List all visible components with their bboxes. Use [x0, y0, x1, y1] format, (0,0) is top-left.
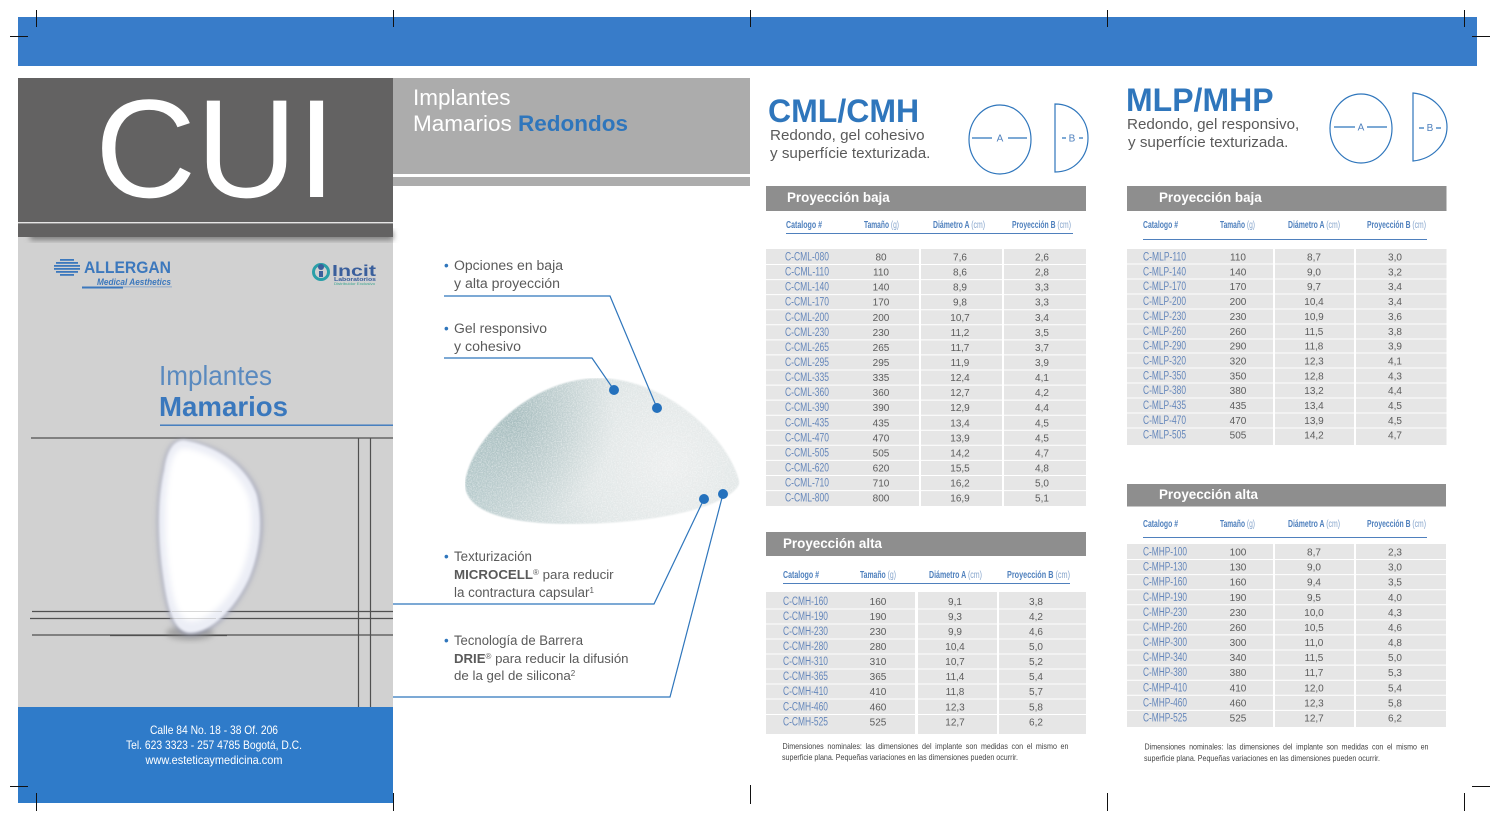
table: MHP proyeccion alta: 11,5	[1305, 653, 1324, 664]
table: MLP proyeccion baja: 4,1	[1388, 356, 1402, 368]
table: MHP proyeccion alta: 12,3	[1304, 698, 1324, 709]
callout: drie: 2	[571, 669, 576, 678]
table: MHP proyeccion alta: C-MHP-460	[1143, 697, 1187, 709]
table: CML proyeccion baja: C-CML-390	[785, 402, 829, 414]
logo: Incit: Distribuidor Exclusivo	[334, 282, 375, 286]
table: MLP proyeccion baja: 505	[1230, 431, 1247, 442]
heading: CML/CMH: Redondo, gel cohesivo	[770, 127, 925, 144]
diagram: MLP dimensions: A	[1358, 122, 1365, 134]
table: CMH proyeccion alta: Tamaño (g)	[860, 570, 896, 581]
table: CML proyeccion baja: 800	[873, 494, 890, 505]
top blue band	[18, 17, 1477, 66]
heading: Implantes Mamarios	[159, 360, 393, 426]
diagram: CML dimensions: B	[1069, 134, 1076, 144]
table: CMH proyeccion alta: C-CMH-190	[783, 611, 828, 623]
table: CML proyeccion baja: C-CML-470	[785, 432, 829, 444]
table: MHP proyeccion alta: Tamaño (g)	[1220, 519, 1255, 530]
table: MLP proyeccion baja: C-MLP-110	[1143, 252, 1186, 264]
table: CML proyeccion baja: C-CML-800	[785, 493, 829, 505]
table: MHP proyeccion alta: 190	[1230, 593, 1247, 604]
table: CML proyeccion baja: 505	[873, 448, 890, 459]
logo: Incit: Laboratorios	[334, 277, 376, 283]
diagram: CML dimensions	[969, 104, 1088, 174]
panel: left cover	[18, 70, 393, 803]
table: CML proyeccion baja: 16,2	[950, 479, 970, 490]
implant: dome	[465, 378, 740, 524]
table: CMH proyeccion alta: 6,2	[1029, 718, 1043, 728]
table: MLP proyeccion baja: 11,8	[1305, 342, 1324, 353]
callout: drie: DRIE	[454, 651, 486, 666]
table: MLP proyeccion baja: 170	[1230, 282, 1247, 293]
footnote: MLP/MHP	[1144, 742, 1429, 763]
table: CML proyeccion baja: 80	[875, 252, 887, 264]
table: MLP proyeccion baja: 8,7	[1307, 252, 1321, 264]
table: CML proyeccion baja: 470	[873, 433, 890, 444]
table: MLP proyeccion baja: 13,4	[1304, 401, 1324, 412]
table: MHP proyeccion alta: 5,4	[1388, 683, 1402, 694]
callout: drie: •	[444, 633, 449, 648]
table: CML proyeccion baja: 265	[873, 343, 890, 354]
diagram: MLP dimensions	[1330, 93, 1447, 163]
table: MHP proyeccion alta	[1127, 484, 1447, 727]
callout: microcell: la contractura capsular	[454, 585, 589, 600]
table: CML proyeccion baja: 7,6	[953, 252, 967, 264]
table: CMH proyeccion alta: 11,4	[946, 672, 965, 683]
table: CMH proyeccion alta: 3,8	[1029, 597, 1043, 608]
table: MLP proyeccion baja: 12,3	[1304, 356, 1324, 368]
table: MLP proyeccion baja: C-MLP-505	[1143, 430, 1186, 442]
table: CML proyeccion baja: 11,2	[951, 328, 970, 339]
table: CMH proyeccion alta: 160	[870, 597, 887, 608]
table: CML proyeccion baja: C-CML-295	[785, 357, 829, 369]
table: CMH proyeccion alta: 4,2	[1029, 612, 1043, 623]
callout: drie: Tecnología de Barrera	[454, 633, 583, 648]
table: MHP proyeccion alta: 100	[1230, 548, 1247, 558]
table: MLP proyeccion baja: C-MLP-380	[1143, 385, 1186, 397]
table: MLP proyeccion baja: Catalogo #	[1143, 220, 1178, 231]
table: MLP proyeccion baja: C-MLP-140	[1143, 266, 1186, 278]
table: CMH proyeccion alta: 4,6	[1029, 627, 1043, 638]
table: CML proyeccion baja: 3,3	[1035, 283, 1049, 294]
table: MHP proyeccion alta: 2,3	[1388, 548, 1402, 558]
table: MLP proyeccion baja: 3,9	[1388, 342, 1402, 353]
table: CML proyeccion baja: 10,7	[950, 313, 970, 324]
table: CML proyeccion baja: 2,8	[1035, 268, 1049, 279]
callout: drie: ®	[486, 652, 492, 661]
table: CMH proyeccion alta: 190	[870, 612, 887, 623]
heading: CML/CMH: y superfície texturizada.	[770, 145, 930, 162]
table: MLP proyeccion baja: 9,7	[1307, 282, 1321, 293]
table: CML proyeccion baja: Proyección baja	[787, 190, 890, 205]
table: CML proyeccion baja: 4,1	[1035, 373, 1049, 384]
table: MLP proyeccion baja: 4,7	[1388, 431, 1402, 442]
table: MLP proyeccion baja: 230	[1230, 312, 1247, 323]
heading: CML/CMH	[768, 93, 930, 162]
table: CML proyeccion baja: 435	[873, 418, 890, 429]
table: MHP proyeccion alta: C-MHP-260	[1143, 622, 1187, 634]
table: MLP proyeccion baja: 435	[1230, 401, 1247, 412]
heading: MLP/MHP	[1126, 82, 1299, 151]
table: MLP proyeccion baja: 320	[1230, 356, 1247, 368]
table: CML proyeccion baja: Tamaño (g)	[864, 220, 899, 231]
table: MLP proyeccion baja: C-MLP-170	[1143, 281, 1186, 293]
callout: microcell: Texturización	[454, 549, 532, 564]
table: CML proyeccion baja: 4,5	[1035, 433, 1049, 444]
callout: gel: •	[444, 321, 449, 336]
table: MLP proyeccion baja: 470	[1230, 416, 1247, 427]
table: MLP proyeccion baja: C-MLP-470	[1143, 415, 1186, 427]
table: MHP proyeccion alta: 10,0	[1304, 608, 1324, 619]
table: MLP proyeccion baja: Diámetro A (cm)	[1288, 220, 1340, 231]
callout: gel	[444, 321, 619, 395]
table: MHP proyeccion alta: Catalogo #	[1143, 519, 1178, 530]
table: CMH proyeccion alta: C-CMH-160	[783, 596, 828, 608]
callout: proyeccion: Opciones en baja	[454, 258, 564, 273]
table: MHP proyeccion alta: 4,0	[1388, 593, 1402, 604]
table: MLP proyeccion baja: 3,4	[1388, 297, 1402, 308]
table: MLP proyeccion baja: 3,6	[1388, 312, 1402, 323]
table: CMH proyeccion alta: 525	[870, 718, 887, 728]
table: MLP proyeccion baja: C-MLP-230	[1143, 311, 1186, 323]
table: MHP proyeccion alta: 9,5	[1307, 593, 1321, 604]
table: MHP proyeccion alta: C-MHP-380	[1143, 667, 1187, 679]
panel: middle header	[393, 78, 750, 186]
table: MHP proyeccion alta: 12,0	[1304, 683, 1324, 694]
table: MHP proyeccion alta: C-MHP-340	[1143, 652, 1187, 664]
table: MLP proyeccion baja: 12,8	[1304, 371, 1324, 382]
table: CMH proyeccion alta: 12,7	[945, 718, 965, 728]
table: MHP proyeccion alta: 4,8	[1388, 638, 1402, 649]
table: CML proyeccion baja: 390	[873, 403, 890, 414]
table: CML proyeccion baja: 11,9	[951, 358, 970, 369]
heading: MLP/MHP: Redondo, gel responsivo,	[1127, 116, 1299, 133]
table: CMH proyeccion alta: C-CMH-525	[783, 716, 828, 728]
table: CML proyeccion baja: C-CML-710	[785, 478, 829, 490]
table: MHP proyeccion alta: 12,7	[1304, 714, 1324, 724]
table: CML proyeccion baja: 620	[873, 464, 890, 474]
table: CMH proyeccion alta: Diámetro A (cm)	[929, 570, 982, 581]
table: MLP proyeccion baja: 380	[1230, 386, 1247, 397]
diagram: CML dimensions: A	[997, 134, 1004, 144]
table: MHP proyeccion alta: C-MHP-300	[1143, 637, 1187, 649]
table: CML proyeccion baja: C-CML-230	[785, 327, 829, 339]
table: CML proyeccion baja: 4,8	[1035, 464, 1049, 474]
callout: drie: para reducir la difusión	[491, 651, 628, 666]
table: CML proyeccion baja: 15,5	[950, 464, 970, 474]
table: MHP proyeccion alta: 5,0	[1388, 653, 1402, 664]
table: MLP proyeccion baja: C-MLP-435	[1143, 400, 1186, 412]
table: CMH proyeccion alta: 230	[870, 627, 887, 638]
table: MHP proyeccion alta: 230	[1230, 608, 1247, 619]
diagram: MLP dimensions: B	[1427, 123, 1434, 134]
table: MHP proyeccion alta: 130	[1230, 563, 1247, 574]
table: CML proyeccion baja: 5,0	[1035, 479, 1049, 490]
table: MLP proyeccion baja: C-MLP-290	[1143, 341, 1186, 353]
table: CMH proyeccion alta: 10,7	[945, 657, 965, 668]
table: CMH proyeccion alta: 310	[870, 657, 887, 668]
table: MLP proyeccion baja: Proyección B (cm)	[1367, 220, 1426, 231]
table: CMH proyeccion alta: 5,7	[1029, 687, 1043, 698]
table: MHP proyeccion alta: Proyección alta	[1159, 487, 1259, 502]
table: MLP proyeccion baja: C-MLP-320	[1143, 356, 1186, 368]
table: MHP proyeccion alta: Proyección B (cm)	[1367, 519, 1426, 530]
table: MLP proyeccion baja: 4,5	[1388, 401, 1402, 412]
table: CMH proyeccion alta: 9,9	[948, 627, 962, 638]
table: MLP proyeccion baja: 110	[1230, 252, 1246, 264]
table: CML proyeccion baja: 5,1	[1035, 494, 1049, 505]
table: CML proyeccion baja: 9,8	[953, 298, 967, 309]
table: CMH proyeccion alta: C-CMH-460	[783, 702, 828, 714]
table: MHP proyeccion alta: C-MHP-410	[1143, 682, 1187, 694]
grid lines	[30, 438, 393, 707]
table: CML proyeccion baja: C-CML-170	[785, 297, 829, 309]
table: CML proyeccion baja: 3,5	[1035, 328, 1049, 339]
table: CMH proyeccion alta: 5,0	[1029, 642, 1043, 653]
table: CMH proyeccion alta: 11,8	[946, 687, 965, 698]
table: MHP proyeccion alta: 410	[1230, 683, 1247, 694]
table: CMH proyeccion alta: Proyección B (cm)	[1007, 570, 1070, 581]
table: CMH proyeccion alta: 5,4	[1029, 672, 1043, 683]
table: MLP proyeccion baja: 9,0	[1307, 267, 1321, 278]
logo: Incit: Incit	[332, 263, 376, 280]
logo: Allergan: Medical Aesthetics	[97, 277, 171, 288]
table: MHP proyeccion alta: C-MHP-130	[1143, 562, 1187, 574]
callout: microcell: MICROCELL	[454, 567, 533, 582]
table: CML proyeccion baja: 335	[873, 373, 890, 384]
table: CMH proyeccion alta: 12,3	[945, 702, 965, 714]
implant: side view	[158, 440, 262, 640]
table: CMH proyeccion alta: C-CMH-310	[783, 656, 828, 668]
table: CMH proyeccion alta: 5,8	[1029, 702, 1043, 714]
table: CML proyeccion baja: C-CML-360	[785, 387, 829, 399]
table: MLP proyeccion baja: 200	[1230, 297, 1247, 308]
table: CML proyeccion baja: 295	[873, 358, 890, 369]
table: CML proyeccion baja: 3,4	[1035, 313, 1049, 324]
table: MHP proyeccion alta: 9,4	[1307, 578, 1321, 589]
table: CML proyeccion baja: 13,4	[950, 418, 970, 429]
table: MHP proyeccion alta: 9,0	[1307, 563, 1321, 574]
table: CMH proyeccion alta	[766, 532, 1086, 734]
callout: microcell: para reducir	[539, 567, 614, 582]
footer: contact: Tel. 623 3323 - 257 4785 Bogotá, D.C.	[126, 738, 302, 752]
table: CML proyeccion baja: 4,4	[1035, 403, 1049, 414]
callout: proyeccion: •	[444, 258, 449, 273]
table: CML proyeccion baja: C-CML-505	[785, 447, 829, 459]
table: CML proyeccion baja: 16,9	[950, 494, 970, 505]
table: CMH proyeccion alta: C-CMH-280	[783, 641, 828, 653]
table: MHP proyeccion alta: 4,3	[1388, 608, 1402, 619]
table: MHP proyeccion alta: C-MHP-525	[1143, 712, 1187, 724]
table: CML proyeccion baja: Catalogo #	[786, 220, 822, 231]
table: MLP proyeccion baja: Tamaño (g)	[1220, 220, 1255, 231]
table: MLP proyeccion baja: 290	[1230, 342, 1247, 353]
table: CML proyeccion baja: C-CML-140	[785, 282, 829, 294]
table: MLP proyeccion baja: 140	[1230, 267, 1247, 278]
table: CML proyeccion baja: 3,9	[1035, 358, 1049, 369]
title: CUI: CUI	[95, 70, 336, 227]
callout: drie: de la gel de silicona	[454, 668, 571, 683]
table: CML proyeccion baja: 12,7	[950, 388, 970, 399]
table: MHP proyeccion alta: 340	[1230, 653, 1247, 664]
table: MHP proyeccion alta: 11,0	[1305, 638, 1324, 649]
table: MHP proyeccion alta: 260	[1230, 623, 1247, 634]
heading: Implantes Mamarios: Mamarios	[159, 391, 288, 422]
table: MLP proyeccion baja: 14,2	[1304, 431, 1324, 442]
table: MLP proyeccion baja: 10,4	[1304, 297, 1324, 308]
table: MLP proyeccion baja: 4,3	[1388, 371, 1402, 382]
panel: middle header: Implantes	[413, 85, 511, 110]
table: CMH proyeccion alta: C-CMH-365	[783, 671, 828, 683]
table: CML proyeccion baja: 3,3	[1035, 298, 1049, 309]
table: CML proyeccion baja: 170	[873, 298, 890, 309]
footer: contact: www.esteticaymedicina.com	[145, 753, 282, 767]
table: CML proyeccion baja: Diámetro A (cm)	[933, 220, 985, 231]
table: MHP proyeccion alta: 5,3	[1388, 668, 1402, 679]
table: MHP proyeccion alta: 160	[1230, 578, 1247, 589]
footnote: CML/CMH: Dimensiones nominales: las dimensiones del implante son medidas con el mismo en	[782, 741, 1069, 751]
table: CML proyeccion baja: 710	[873, 479, 890, 490]
table: MHP proyeccion alta: 10,5	[1304, 623, 1324, 634]
table: MLP proyeccion baja: 3,8	[1388, 327, 1402, 338]
table: MHP proyeccion alta: 525	[1230, 714, 1247, 724]
table: MLP proyeccion baja: 3,0	[1388, 252, 1402, 264]
table: CML proyeccion baja: 360	[873, 388, 890, 399]
table: CML proyeccion baja: Proyección B (cm)	[1012, 220, 1071, 231]
table: MHP proyeccion alta: C-MHP-190	[1143, 592, 1187, 604]
table: CML proyeccion baja: 4,2	[1035, 388, 1049, 399]
table: MLP proyeccion baja: 3,4	[1388, 282, 1402, 293]
logo: Allergan	[54, 259, 172, 288]
table: CML proyeccion baja: C-CML-265	[785, 342, 829, 354]
table: CML proyeccion baja: C-CML-080	[785, 252, 829, 264]
table: MHP proyeccion alta: C-MHP-100	[1143, 546, 1187, 558]
table: MLP proyeccion baja: 4,5	[1388, 416, 1402, 427]
table: CML proyeccion baja: 8,9	[953, 283, 967, 294]
table: CMH proyeccion alta: Proyección alta	[783, 536, 883, 551]
table: MLP proyeccion baja: 13,9	[1304, 416, 1324, 427]
table: CMH proyeccion alta: 460	[870, 702, 887, 714]
heading: MLP/MHP: y superfície texturizada.	[1128, 134, 1288, 151]
callout: microcell	[393, 494, 709, 604]
table: CML proyeccion baja: 14,2	[950, 448, 970, 459]
table: CML proyeccion baja: 13,9	[950, 433, 970, 444]
table: MLP proyeccion baja: 10,9	[1304, 312, 1324, 323]
table: CML proyeccion baja: C-CML-435	[785, 417, 829, 429]
table: CMH proyeccion alta: 410	[870, 687, 887, 698]
table: CML proyeccion baja: 8,6	[953, 268, 967, 279]
callout: microcell: ®	[533, 568, 539, 577]
table: MLP proyeccion baja: 4,4	[1388, 386, 1402, 397]
table: MLP proyeccion baja: 11,5	[1305, 327, 1324, 338]
table: MHP proyeccion alta: 4,6	[1388, 623, 1402, 634]
table: MHP proyeccion alta: C-MHP-230	[1143, 607, 1187, 619]
callout: proyeccion	[444, 258, 662, 413]
table: CMH proyeccion alta: 10,4	[945, 642, 965, 653]
table: MLP proyeccion baja: 260	[1230, 327, 1247, 338]
table: CMH proyeccion alta: 280	[870, 642, 887, 653]
table: CML proyeccion baja	[766, 186, 1086, 506]
table: MHP proyeccion alta: 3,0	[1388, 563, 1402, 574]
table: CML proyeccion baja: 12,4	[950, 373, 970, 384]
footnote: CML/CMH: superficie plana. Pequeñas variaciones en las dimensiones pueden ocurrir.	[782, 752, 1018, 762]
table: CML proyeccion baja: 140	[873, 283, 890, 294]
table: MLP proyeccion baja: 3,2	[1388, 267, 1402, 278]
table: MHP proyeccion alta: 380	[1230, 668, 1247, 679]
table: CML proyeccion baja: 4,5	[1035, 418, 1049, 429]
table: MLP proyeccion baja	[1127, 186, 1447, 445]
callout: gel: y cohesivo	[454, 339, 521, 354]
table: MHP proyeccion alta: 6,2	[1388, 714, 1402, 724]
table: CML proyeccion baja: 4,7	[1035, 448, 1049, 459]
footnote: MLP/MHP: Dimensiones nominales: las dimensiones del implante son medidas con el mismo en	[1144, 742, 1429, 752]
table: CML proyeccion baja: 230	[873, 328, 890, 339]
table: CML proyeccion baja: 12,9	[950, 403, 970, 414]
table: MHP proyeccion alta: 300	[1230, 638, 1247, 649]
table: MLP proyeccion baja: 13,2	[1304, 386, 1324, 397]
table: MHP proyeccion alta: 5,8	[1388, 698, 1402, 709]
callout: drie	[393, 489, 728, 697]
footer: contact: Calle 84 No. 18 - 38 Of. 206	[150, 723, 278, 737]
panel: middle header: Mamarios Redondos	[413, 111, 628, 136]
table: CML proyeccion baja: C-CML-110	[785, 267, 829, 279]
heading: CML/CMH: CML/CMH	[768, 93, 919, 129]
heading: Implantes Mamarios: Implantes	[159, 360, 272, 391]
footnote: MLP/MHP: superficie plana. Pequeñas variaciones en las dimensiones pueden ocurrir.	[1144, 753, 1380, 763]
table: CMH proyeccion alta: 9,1	[948, 597, 962, 608]
table: MLP proyeccion baja: C-MLP-260	[1143, 326, 1186, 338]
table: MLP proyeccion baja: Proyección baja	[1159, 190, 1262, 205]
footnote: CML/CMH	[782, 741, 1069, 762]
table: MLP proyeccion baja: C-MLP-350	[1143, 370, 1186, 382]
table: CML proyeccion baja: 11,7	[951, 343, 970, 354]
logo: Allergan: ALLERGAN	[84, 259, 171, 277]
callout: gel: Gel responsivo	[454, 321, 547, 336]
table: CML proyeccion baja: 200	[873, 313, 890, 324]
table: CML proyeccion baja: C-CML-335	[785, 372, 829, 384]
table: CML proyeccion baja: C-CML-620	[785, 462, 829, 474]
callout: microcell: 1	[589, 586, 594, 595]
table: CMH proyeccion alta: C-CMH-230	[783, 626, 828, 638]
logo: Incit	[314, 263, 376, 286]
table: CMH proyeccion alta: 365	[870, 672, 887, 683]
table: MHP proyeccion alta: 8,7	[1307, 548, 1321, 558]
footer: contact	[18, 707, 393, 803]
table: MHP proyeccion alta: C-MHP-160	[1143, 577, 1187, 589]
table: MLP proyeccion baja: C-MLP-200	[1143, 296, 1186, 308]
table: CML proyeccion baja: C-CML-200	[785, 312, 829, 324]
callout: microcell: •	[444, 549, 449, 564]
table: CMH proyeccion alta: Catalogo #	[783, 570, 819, 581]
table: CML proyeccion baja: 2,6	[1035, 252, 1049, 264]
table: CMH proyeccion alta: 5,2	[1029, 657, 1043, 668]
table: MHP proyeccion alta: Diámetro A (cm)	[1288, 519, 1340, 530]
table: CMH proyeccion alta: C-CMH-410	[783, 686, 828, 698]
table: CML proyeccion baja: 110	[873, 268, 889, 279]
heading: MLP/MHP: MLP/MHP	[1126, 82, 1274, 118]
callout: proyeccion: y alta proyección	[454, 276, 560, 291]
table: CMH proyeccion alta: 9,3	[948, 612, 962, 623]
table: CML proyeccion baja: 3,7	[1035, 343, 1049, 354]
table: MHP proyeccion alta: 460	[1230, 698, 1247, 709]
table: MLP proyeccion baja: 350	[1230, 371, 1247, 382]
table: MHP proyeccion alta: 11,7	[1305, 668, 1324, 679]
table: MHP proyeccion alta: 3,5	[1388, 578, 1402, 589]
